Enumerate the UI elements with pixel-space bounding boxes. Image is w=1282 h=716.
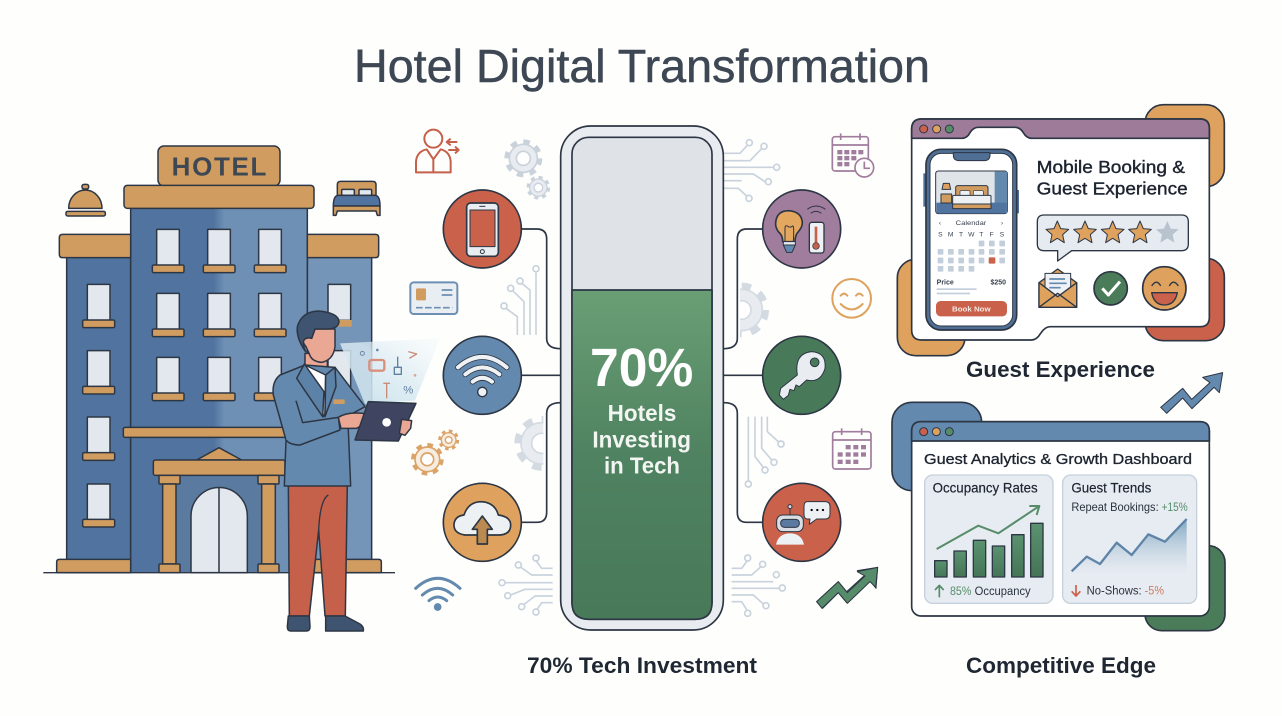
no-shows stat: -5% — [1145, 584, 1164, 598]
occupancy stat: 85% — [950, 584, 972, 598]
back tiles — [897, 105, 1224, 356]
back tiles — [892, 402, 1225, 631]
icon: wifi circle — [443, 336, 521, 414]
icon: credit card — [410, 282, 457, 314]
calendar: F — [990, 231, 994, 238]
occupancy stat — [935, 584, 1031, 598]
calendar: T — [959, 231, 963, 238]
icon: smiley outline — [832, 279, 871, 318]
book now button — [936, 301, 1007, 316]
hologram beam: % — [403, 384, 413, 396]
icon: green growth arrow — [817, 567, 878, 608]
gauge caption — [592, 400, 691, 478]
guest trend area chart — [1072, 519, 1187, 574]
hotel building — [43, 146, 395, 573]
calendar: ‹ — [939, 220, 941, 227]
icon: bed — [333, 181, 380, 215]
title: Hotel Digital Transformation — [354, 40, 930, 92]
icon: person exchange — [416, 130, 459, 172]
card: guest trends: +15% — [1162, 501, 1188, 514]
price row: Price — [937, 280, 954, 287]
gauge caption: Hotels — [608, 400, 676, 426]
calendar: T — [979, 231, 983, 238]
icon: blue growth arrow — [1161, 373, 1223, 413]
occupancy stat: Occupancy — [975, 584, 1031, 598]
icon: check badge — [1094, 272, 1127, 305]
panel heading — [1037, 157, 1188, 198]
book now button: Book Now — [952, 304, 991, 313]
businessman — [273, 311, 416, 631]
gauge caption: Investing — [592, 426, 691, 452]
icon: happy face — [1143, 267, 1186, 310]
card: guest trends: Repeat Bookings: — [1071, 501, 1159, 514]
panel: guest experience — [897, 105, 1224, 356]
dashboard heading: Guest Analytics & Growth Dashboard — [924, 451, 1192, 468]
calendar: M — [948, 231, 953, 238]
icon: mobile circle — [443, 190, 521, 268]
calendar: S — [1000, 231, 1005, 238]
browser window — [912, 119, 1209, 340]
panel heading: Mobile Booking & — [1037, 157, 1185, 177]
no-shows stat — [1072, 584, 1164, 598]
gauge: 70 percent — [561, 126, 723, 630]
central gauge and feature icons — [410, 126, 878, 630]
icon: smart room circle — [763, 190, 841, 268]
icon: envelope — [1039, 269, 1077, 307]
room photo — [936, 171, 1007, 214]
label: 70% tech investment: 70% Tech Investment — [527, 653, 758, 678]
card: occupancy rates — [925, 475, 1053, 603]
calendar: › — [1001, 220, 1003, 227]
card: occupancy rates: Occupancy Rates — [933, 480, 1038, 495]
decorative circuits and gears — [413, 140, 785, 616]
phone mockup — [923, 149, 1019, 330]
calendar: W — [968, 231, 975, 238]
price row: $250 — [990, 280, 1006, 287]
occupancy trend arrow — [937, 506, 1039, 549]
connector lines — [522, 229, 763, 522]
occupancy bars — [935, 523, 1043, 577]
calendar: Calendar — [956, 220, 987, 227]
card: guest trends — [1063, 475, 1197, 603]
browser header — [912, 119, 1209, 138]
hotel building: HOTEL — [172, 151, 266, 181]
icon: cloud upload circle — [443, 483, 521, 561]
hologram beam — [340, 338, 440, 404]
icon: key circle — [763, 336, 841, 414]
card: guest trends: Guest Trends — [1071, 480, 1151, 495]
icon: calendar — [833, 428, 871, 469]
price row — [937, 280, 1006, 294]
star rating bubble — [1037, 215, 1188, 261]
label: guest experience: Guest Experience — [966, 357, 1155, 382]
calendar — [938, 220, 1005, 272]
icon: green growth arrow left — [817, 567, 878, 608]
gauge caption: in Tech — [604, 452, 680, 478]
label: competitive edge: Competitive Edge — [966, 653, 1156, 678]
no-shows stat: No-Shows: — [1087, 584, 1142, 598]
illustration: hotel and manager — [43, 146, 440, 631]
gauge value: 70% — [590, 339, 693, 398]
icon: service bell — [66, 184, 105, 216]
icon: wifi small — [416, 578, 460, 609]
calendar: S — [938, 231, 943, 238]
icon: chatbot circle — [763, 483, 841, 561]
browser window — [912, 422, 1209, 616]
panel: analytics dashboard — [817, 373, 1225, 631]
icon: calendar with clock — [832, 133, 874, 177]
panel heading: Guest Experience — [1037, 178, 1188, 198]
